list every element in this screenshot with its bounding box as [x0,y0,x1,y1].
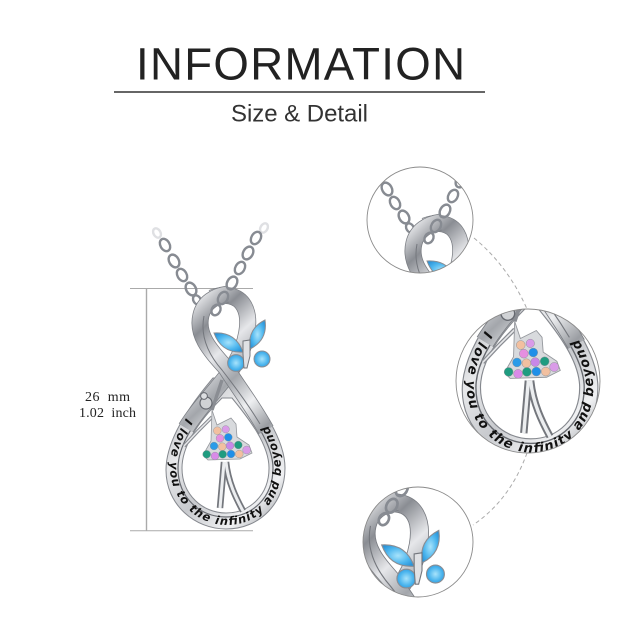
dimension bracket [130,288,253,531]
connector: middle detail to bottom detail [473,453,527,525]
dimension label: 1.02 inch [79,406,136,421]
butterfly [214,320,270,371]
detail circle: ballerina and inscription: I love you to the infinity and beyond [464,330,595,452]
title: INFORMATION [136,38,465,90]
dimension label: 26 mm [85,390,130,405]
connector: top detail to middle detail [474,238,527,309]
detail circle: chain and bail [366,166,474,274]
teardrop ring [166,378,285,529]
ballerina [184,380,252,511]
pendant necklace [152,222,286,530]
subtitle: Size & Detail [231,100,368,128]
infinity ribbon [186,294,266,430]
detail circle: butterfly [362,486,474,598]
dimension label [79,390,136,421]
front chain links [210,275,240,317]
chain [151,222,270,306]
engraved inscription: I love you to the infinity and beyond [168,418,282,525]
